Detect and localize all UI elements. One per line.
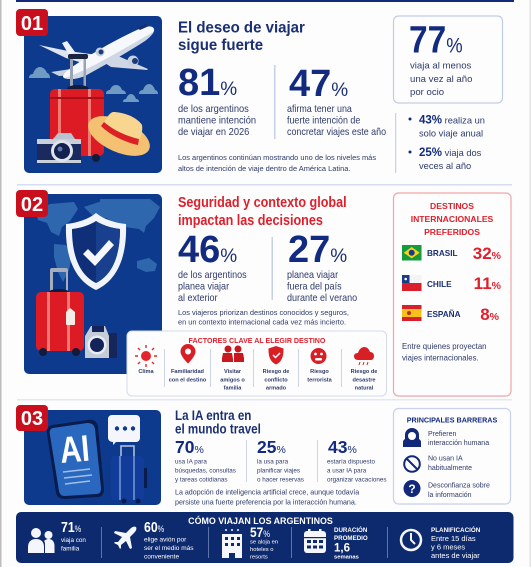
stat: duración: semanas bbox=[334, 554, 359, 560]
icon: phone AI: AI bbox=[58, 429, 91, 472]
stat: 71%: familia bbox=[61, 546, 80, 552]
stat: planificación: antes de viajar bbox=[431, 551, 480, 560]
icon: visitar amigos: familia bbox=[224, 386, 242, 392]
icon: badge 02: 02 bbox=[21, 194, 43, 216]
card: 77%: 77 bbox=[409, 19, 446, 61]
stat: 70%: búsquedas, consultas bbox=[175, 468, 236, 474]
stat: duración: 1,6 bbox=[334, 542, 350, 554]
panel: factores clave: FACTORES CLAVE AL ELEGIR DESTINO bbox=[189, 337, 326, 345]
stat: 71%: viaja con bbox=[61, 537, 86, 544]
panel: destinos internacionales: ESPAÑA bbox=[427, 309, 461, 319]
stat: 47% bbox=[287, 63, 386, 137]
bullets: frequency: veces al año bbox=[419, 161, 471, 171]
stat: 27%: 27% bbox=[288, 229, 347, 271]
stat: duración: PROMEDIO bbox=[334, 535, 368, 542]
card: 77% bbox=[394, 16, 502, 103]
icon: flag España bbox=[402, 305, 422, 321]
panel: cómo viajan los argentinos bbox=[16, 512, 514, 563]
stat: 47%: 47% bbox=[289, 63, 348, 105]
stat: 47%: fuerte intención de bbox=[287, 115, 360, 126]
icon: familia bbox=[28, 528, 54, 553]
icon: straw hat bbox=[82, 108, 156, 164]
icon: terrorista bbox=[307, 348, 333, 383]
stat: 70% bbox=[175, 437, 236, 484]
icon: persona bbox=[403, 428, 421, 447]
icon: clima: Clima bbox=[138, 369, 155, 375]
stat: 47%: afirma tener una bbox=[287, 104, 353, 114]
panel: principales barreras: PRINCIPALES BARRERAS bbox=[407, 416, 497, 424]
stat: 81%: de viajar en 2026 bbox=[178, 127, 249, 138]
stat: 70%: usa IA para bbox=[175, 458, 207, 466]
icon: familiaridad: Familiaridad bbox=[171, 369, 205, 375]
panel: cómo viajan los argentinos: CÓMO VIAJAN LOS ARGENTINOS bbox=[188, 515, 333, 526]
text: section 02 note: Los viajeros priorizan destinos conocidos y seguros, bbox=[178, 308, 349, 317]
panel: principales barreras: habitualmente bbox=[428, 465, 472, 472]
panel: section 01 illustration bbox=[16, 9, 162, 173]
icon: airplane bbox=[39, 24, 154, 79]
panel: principales barreras: Prefieren bbox=[428, 431, 457, 438]
icon: flag Chile bbox=[402, 275, 422, 291]
icon: pregunta: ? bbox=[408, 482, 416, 496]
stat: duración bbox=[334, 526, 368, 560]
stat: 60%: 60% bbox=[144, 519, 165, 535]
stat: 25% bbox=[257, 437, 304, 484]
heading: section 02: Seguridad y contexto global bbox=[178, 193, 347, 210]
icon: avión bbox=[114, 527, 136, 549]
icon: badge 03 bbox=[16, 405, 48, 431]
stat: duración: DURACIÓN bbox=[334, 526, 368, 534]
stat: 81%: mantiene intención bbox=[178, 115, 256, 127]
stat: 81%: 81% bbox=[178, 62, 237, 104]
stat: 60%: ser el medio más bbox=[144, 545, 194, 552]
icon: familiaridad bbox=[169, 344, 207, 383]
icon: visitar amigos: amigos o bbox=[220, 377, 245, 383]
panel: principales barreras: la información bbox=[428, 492, 472, 499]
icon: calendario bbox=[304, 529, 326, 553]
text: section 02 note: en un contexto internacional cada vez más incierto. bbox=[178, 318, 346, 326]
stat: 57%: 57% bbox=[250, 524, 271, 540]
heading: section 01: El deseo de viajar bbox=[178, 19, 305, 37]
stat: 25%: la usa para bbox=[257, 458, 289, 466]
panel: principales barreras: Desconfianza sobre bbox=[428, 482, 490, 490]
stat: 57%: se aloja en bbox=[250, 540, 278, 546]
icon: familiaridad: con el destino bbox=[169, 377, 207, 383]
icon: conflicto armado: conflicto bbox=[264, 377, 288, 383]
stat: 46%: de los argentinos bbox=[178, 269, 247, 280]
stat: 46%: planea viajar bbox=[178, 280, 229, 292]
panel: principales barreras: interacción humana bbox=[428, 440, 489, 447]
panel: destinos internacionales: 11% bbox=[474, 274, 502, 293]
stat: 57%: hoteles o bbox=[250, 547, 274, 553]
stat: 70%: y tareas cotidianas bbox=[175, 476, 228, 484]
icon: desastre natural bbox=[351, 347, 377, 392]
bullets: frequency bbox=[408, 114, 485, 171]
panel: section 02 illustration bbox=[16, 190, 162, 374]
stat: 60%: conveniente bbox=[144, 553, 179, 560]
panel: destinos internacionales: DESTINOS bbox=[430, 201, 474, 211]
icon: prohibido bbox=[404, 456, 420, 472]
panel: destinos internacionales: INTERNACIONALES bbox=[411, 214, 494, 224]
card: 77%: por ocio bbox=[410, 87, 444, 98]
icon: conflicto armado: Riesgo de bbox=[263, 369, 289, 375]
icon: badge 01: 01 bbox=[21, 13, 43, 35]
card: 77%: % bbox=[446, 34, 463, 58]
stat: planificación: PLANIFICACIÓN bbox=[431, 525, 481, 534]
heading: section 01: sigue fuerte bbox=[178, 37, 263, 54]
stat: 70%: 70% bbox=[175, 437, 204, 457]
panel: destinos internacionales: Entre quienes proyectan bbox=[402, 342, 487, 351]
stat: 81% bbox=[178, 62, 256, 138]
stat: 25%: 25% bbox=[257, 437, 286, 457]
icon: shield bbox=[66, 213, 126, 290]
stat: 43%: estaría dispuesto bbox=[327, 458, 375, 466]
icon: desastre natural: Riesgo de bbox=[351, 369, 377, 375]
card: 77%: una vez al año bbox=[410, 74, 472, 85]
icon: speech bubble bbox=[108, 415, 140, 445]
panel: destinos internacionales bbox=[394, 193, 511, 396]
icon: badge 01 bbox=[16, 9, 48, 36]
stat: 43%: a usar IA para bbox=[327, 468, 367, 474]
bullets: frequency: 25% viaja dos bbox=[419, 147, 481, 159]
heading: section 03: La IA entra en bbox=[175, 407, 252, 423]
panel: destinos internacionales: viajes internacionales. bbox=[402, 354, 479, 362]
icon: badge 03: 03 bbox=[21, 408, 43, 430]
text: section 03 note: persiste una fuerte preferencia por la interacción humana. bbox=[175, 498, 357, 506]
stat: 57% bbox=[250, 524, 278, 560]
stat: 60% bbox=[144, 519, 194, 560]
stat: 47%: concretar viajes este año bbox=[287, 127, 386, 137]
stat: 57%: resorts bbox=[250, 554, 268, 560]
heading: section 03: el mundo travel bbox=[175, 420, 261, 437]
stat: 25%: o hacer reservas bbox=[257, 476, 304, 484]
stat: 46%: al exterior bbox=[178, 292, 218, 303]
icon: hotel bbox=[222, 529, 242, 558]
world map bbox=[36, 199, 160, 282]
panel: factores clave bbox=[127, 331, 386, 396]
panel: principales barreras bbox=[394, 408, 510, 504]
icon: conflicto armado bbox=[263, 346, 289, 392]
stat: 81%: de los argentinos bbox=[178, 104, 249, 115]
heading: section 02: impactan las decisiones bbox=[178, 211, 323, 228]
icon: visitar amigos: Visitar bbox=[224, 369, 242, 375]
stat: planificación bbox=[431, 525, 481, 560]
icon: badge 02 bbox=[16, 190, 48, 217]
panel: section 03 illustration bbox=[16, 405, 161, 505]
stat: 27%: fuera del país bbox=[287, 280, 342, 292]
stat: 25%: planificar viajes bbox=[257, 468, 300, 474]
text: section 01 note: altos de intención de viaje dentro de América Latina. bbox=[178, 164, 350, 173]
stat: 43%: 43% bbox=[328, 437, 357, 457]
panel: destinos internacionales: 8% bbox=[480, 305, 500, 324]
icon: terrorista: terrorista bbox=[307, 377, 333, 383]
stat: 71% bbox=[61, 519, 86, 552]
stat: 71%: 71% bbox=[61, 519, 82, 535]
bullets: frequency: solo viaje anual bbox=[419, 128, 483, 138]
icon: reloj bbox=[401, 530, 421, 550]
icon: blue suitcase bbox=[111, 446, 147, 504]
panel: principales barreras: No usan IA bbox=[428, 456, 463, 462]
stat: 27%: durante el verano bbox=[287, 292, 357, 303]
stat: 60%: elige avión por bbox=[144, 537, 187, 544]
panel: destinos internacionales: CHILE bbox=[427, 280, 452, 289]
text: section 03 note: La adopción de inteligencia artificial crece, aunque todavía bbox=[175, 488, 359, 496]
icon: camera bbox=[37, 133, 81, 163]
stat: 27%: planea viajar bbox=[287, 269, 338, 280]
text: section 01 note: Los argentinos continúan mostrando uno de los niveles más bbox=[178, 153, 376, 162]
icon: desastre natural: natural bbox=[355, 386, 374, 392]
stat: planificación: Entre 15 días bbox=[431, 534, 476, 543]
icon: conflicto armado: armado bbox=[266, 386, 287, 392]
card: 77%: viaja al menos bbox=[410, 60, 472, 72]
icon: flag Brasil bbox=[402, 245, 422, 260]
stat: 27% bbox=[287, 229, 357, 303]
icon: visitar amigos bbox=[220, 346, 245, 392]
stat: 43% bbox=[327, 437, 387, 484]
panel: destinos internacionales: BRASIL bbox=[427, 249, 457, 258]
stat: 46%: 46% bbox=[178, 229, 237, 271]
stat: planificación: y 6 meses bbox=[431, 542, 465, 552]
icon: phone AI bbox=[47, 420, 104, 499]
icon: red suitcase bbox=[50, 54, 104, 162]
icon: terrorista: Riesgo bbox=[310, 369, 329, 375]
icon: clouds bbox=[29, 67, 158, 102]
stat: 46% bbox=[178, 229, 247, 303]
stat: 43%: organizar vacaciones bbox=[327, 476, 387, 484]
icon: camera bbox=[85, 326, 117, 358]
icon: red suitcase bbox=[36, 268, 84, 356]
panel: destinos internacionales: 32% bbox=[473, 244, 502, 263]
bullets: frequency: 43% realiza un bbox=[419, 114, 485, 126]
icon: clima bbox=[135, 345, 157, 375]
icon: desastre natural: desastre bbox=[352, 377, 376, 383]
panel: destinos internacionales: PREFERIDOS bbox=[424, 227, 480, 237]
